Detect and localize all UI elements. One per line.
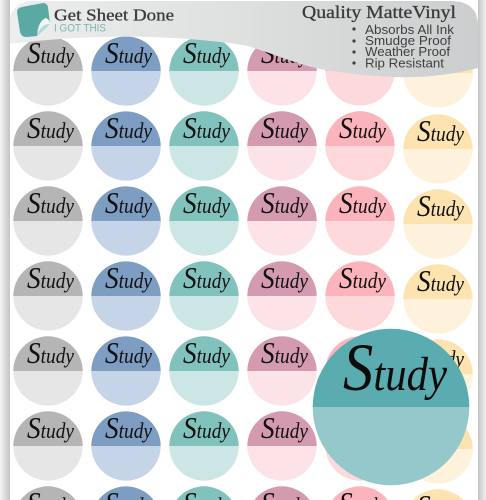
row 1 stickers: Study xyxy=(183,35,230,70)
feature list: Weather Proof xyxy=(365,44,450,59)
tagline: I GOT THIS xyxy=(54,22,106,34)
row 3 stickers: Study xyxy=(27,185,74,220)
enlarged sticker xyxy=(313,329,469,485)
row 6 stickers: Study xyxy=(105,410,152,445)
row 3 stickers: Study xyxy=(339,185,386,220)
row 5 stickers xyxy=(13,335,473,409)
row 1 stickers: Study xyxy=(261,35,308,70)
row 2 stickers: Study xyxy=(417,113,464,148)
row 5 stickers: Study xyxy=(27,335,74,370)
row 2 stickers: Study xyxy=(261,110,308,145)
row 6 stickers: Study xyxy=(261,410,308,445)
row 3 stickers: Study xyxy=(105,185,152,220)
row 6 stickers: Study xyxy=(27,410,74,445)
row 2 stickers: Study xyxy=(339,110,386,145)
row 2 stickers xyxy=(13,110,473,184)
row 4 stickers: Study xyxy=(339,260,386,295)
row 5 stickers: Study xyxy=(183,335,230,370)
row 2 stickers: Study xyxy=(183,110,230,145)
row 4 stickers: Study xyxy=(417,263,464,298)
logo icon xyxy=(17,3,50,37)
row 2 stickers: Study xyxy=(27,110,74,145)
row 5 stickers: Study xyxy=(105,335,152,370)
brand name: Get Sheet Done xyxy=(54,6,174,24)
row 4 stickers: Study xyxy=(105,260,152,295)
row 6 stickers xyxy=(13,410,473,484)
feature list: Smudge Proof xyxy=(365,33,451,48)
sheet shadow right xyxy=(478,0,486,500)
enlarged sticker: Study xyxy=(343,329,448,405)
product title: Quality MatteVinyl xyxy=(302,2,456,22)
row 4 stickers: Study xyxy=(261,260,308,295)
row 6 stickers: Study xyxy=(183,410,230,445)
row 3 stickers: Study xyxy=(417,188,464,223)
row 2 stickers: Study xyxy=(105,110,152,145)
sheet shadow left xyxy=(0,0,10,500)
row 1 stickers: Study xyxy=(27,35,74,70)
feature list: Absorbs All Ink xyxy=(365,22,455,37)
row 3 stickers: Study xyxy=(183,185,230,220)
row 5 stickers: Study xyxy=(417,338,464,373)
feature list xyxy=(352,22,455,70)
row 4 stickers: Study xyxy=(183,260,230,295)
row 3 stickers xyxy=(13,185,473,259)
feature list: Rip Resistant xyxy=(365,56,444,70)
header banner xyxy=(0,0,486,90)
row 4 stickers xyxy=(13,260,473,334)
row 3 stickers: Study xyxy=(261,185,308,220)
row 1 stickers xyxy=(13,35,473,108)
row 4 stickers: Study xyxy=(27,260,74,295)
row 5 stickers: Study xyxy=(261,335,308,370)
row 1 stickers: Study xyxy=(105,35,152,70)
row 7 stickers xyxy=(13,485,473,500)
